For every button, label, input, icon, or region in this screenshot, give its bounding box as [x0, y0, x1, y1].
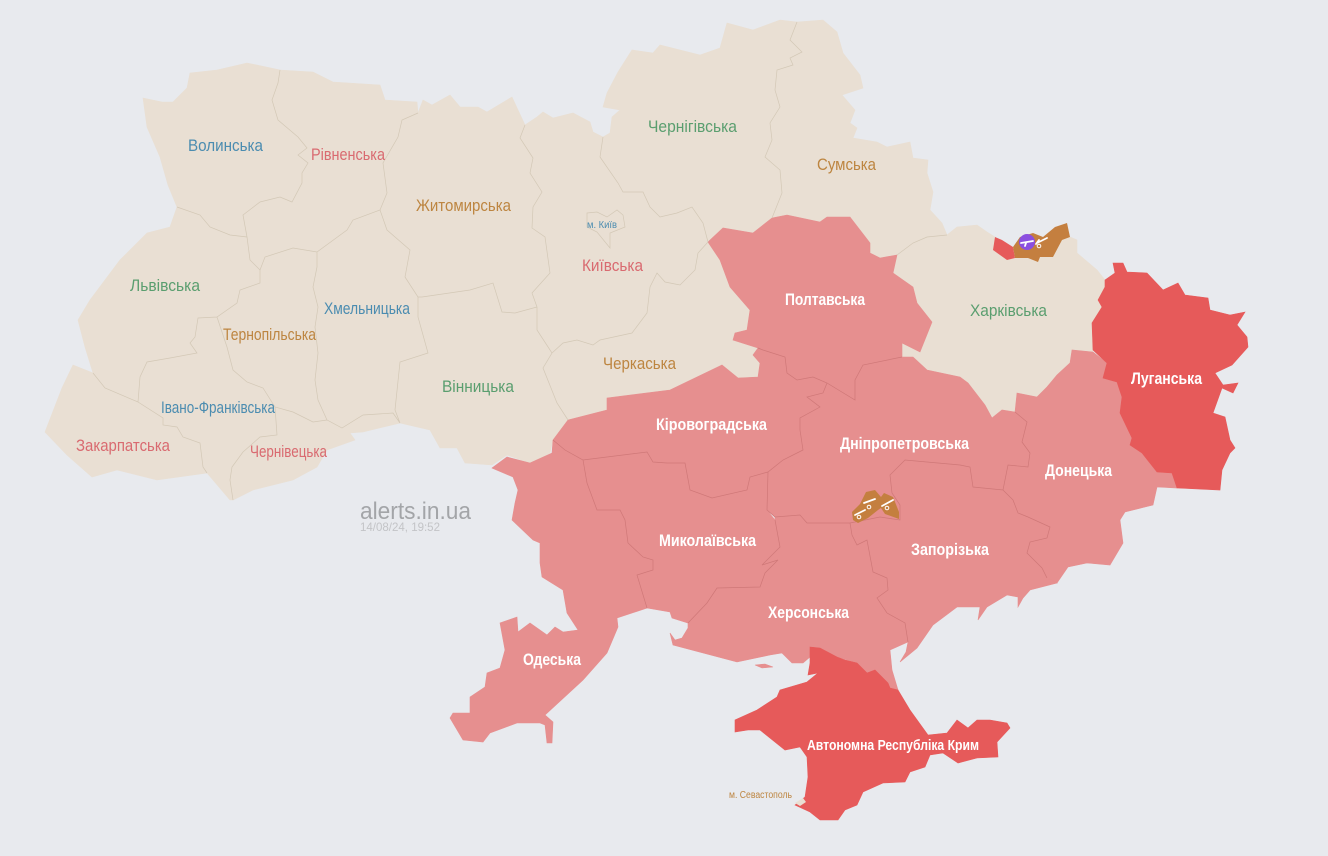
label: Dnipropetrovsk: Дніпропетровська: [840, 434, 969, 453]
alert area: Dnipropetrovsk brown: [852, 490, 899, 523]
region: Luhansk: [1092, 263, 1248, 490]
label: Kyiv city: м. Київ: [587, 220, 617, 231]
label: Sevastopol: м. Севастополь: [729, 790, 792, 801]
label: Chernivtsi: Чернівецька: [250, 442, 327, 461]
region: Volyn: [143, 63, 308, 237]
label: Kherson: Херсонська: [768, 603, 849, 622]
region: Kyiv oblast: [520, 112, 708, 353]
region: Ivano-Frankivsk: [138, 317, 277, 500]
region: Zaporizhzhia: [850, 460, 1057, 662]
region: Dnipropetrovsk: [767, 357, 1030, 523]
alert area: Kharkiv border red: [993, 237, 1015, 260]
region: Chernihiv: [600, 20, 802, 242]
label: Ternopil: Тернопільська: [223, 325, 316, 344]
label: Luhansk: Луганська: [1131, 369, 1202, 388]
region: Zhytomyr: [380, 95, 550, 313]
label: Sumy: Сумська: [817, 155, 876, 174]
icon: artillery Kharkiv: [1036, 238, 1047, 248]
alert area: Kharkiv border brown: [1013, 223, 1070, 262]
label: Kyiv oblast: Київська: [582, 256, 643, 275]
label: Ivano-Frankivsk: Івано-Франківська: [161, 398, 275, 417]
region: Kherson: [670, 515, 908, 690]
label: Cherkasy: Черкаська: [603, 354, 676, 373]
label: Zaporizhzhia: Запорізька: [911, 540, 989, 559]
label: Donetsk: Донецька: [1045, 461, 1112, 480]
label: Zakarpattia: Закарпатська: [76, 436, 170, 455]
region: Cherkasy: [543, 242, 760, 420]
region: Rivne: [243, 70, 418, 270]
icons: artillery Dnipropetrovsk: [855, 499, 893, 519]
region: Lviv: [78, 207, 260, 402]
label: Lviv: Львівська: [130, 276, 200, 295]
region: Kharkiv: [893, 225, 1105, 418]
region: Mykolaiv: [583, 452, 780, 623]
label: Mykolaiv: Миколаївська: [659, 531, 756, 550]
region: Ternopil: [217, 248, 327, 422]
region: Kherson islet: [755, 664, 773, 668]
region: Sumy: [765, 20, 947, 258]
label: Vinnytsia: Вінницька: [442, 377, 514, 396]
region: Zakarpattia: [45, 365, 207, 480]
label: Volyn: Волинська: [188, 136, 263, 155]
region: Poltava: [708, 215, 932, 400]
label: Khmelnytskyi: Хмельницька: [324, 299, 410, 318]
label: Odesa: Одеська: [523, 650, 581, 669]
watermark: site name: alerts.in.ua: [360, 498, 472, 525]
region: Sevastopol: [795, 798, 806, 806]
label: Kirovohrad: Кіровоградська: [656, 415, 767, 434]
label: Rivne: Рівненська: [311, 145, 385, 164]
label: Poltava: Полтавська: [785, 290, 865, 309]
label: Zhytomyr: Житомирська: [416, 196, 511, 215]
label: Crimea: Автономна Республіка Крим: [807, 737, 979, 754]
watermark: timestamp: 14/08/24, 19:52: [360, 520, 440, 534]
label: Kharkiv: Харківська: [970, 301, 1047, 320]
region: Khmelnytskyi: [313, 210, 428, 428]
region: Vinnytsia: [395, 283, 568, 465]
label: Chernihiv: Чернігівська: [648, 117, 737, 136]
icon: purple drone marker: [1019, 234, 1035, 250]
region: Chernivtsi: [230, 407, 400, 500]
region: Kyiv city: [587, 210, 625, 248]
region: Kirovohrad: [552, 348, 827, 498]
region: Odesa: [450, 450, 653, 743]
region: Crimea: [735, 647, 1010, 820]
region: Donetsk: [1003, 350, 1177, 583]
